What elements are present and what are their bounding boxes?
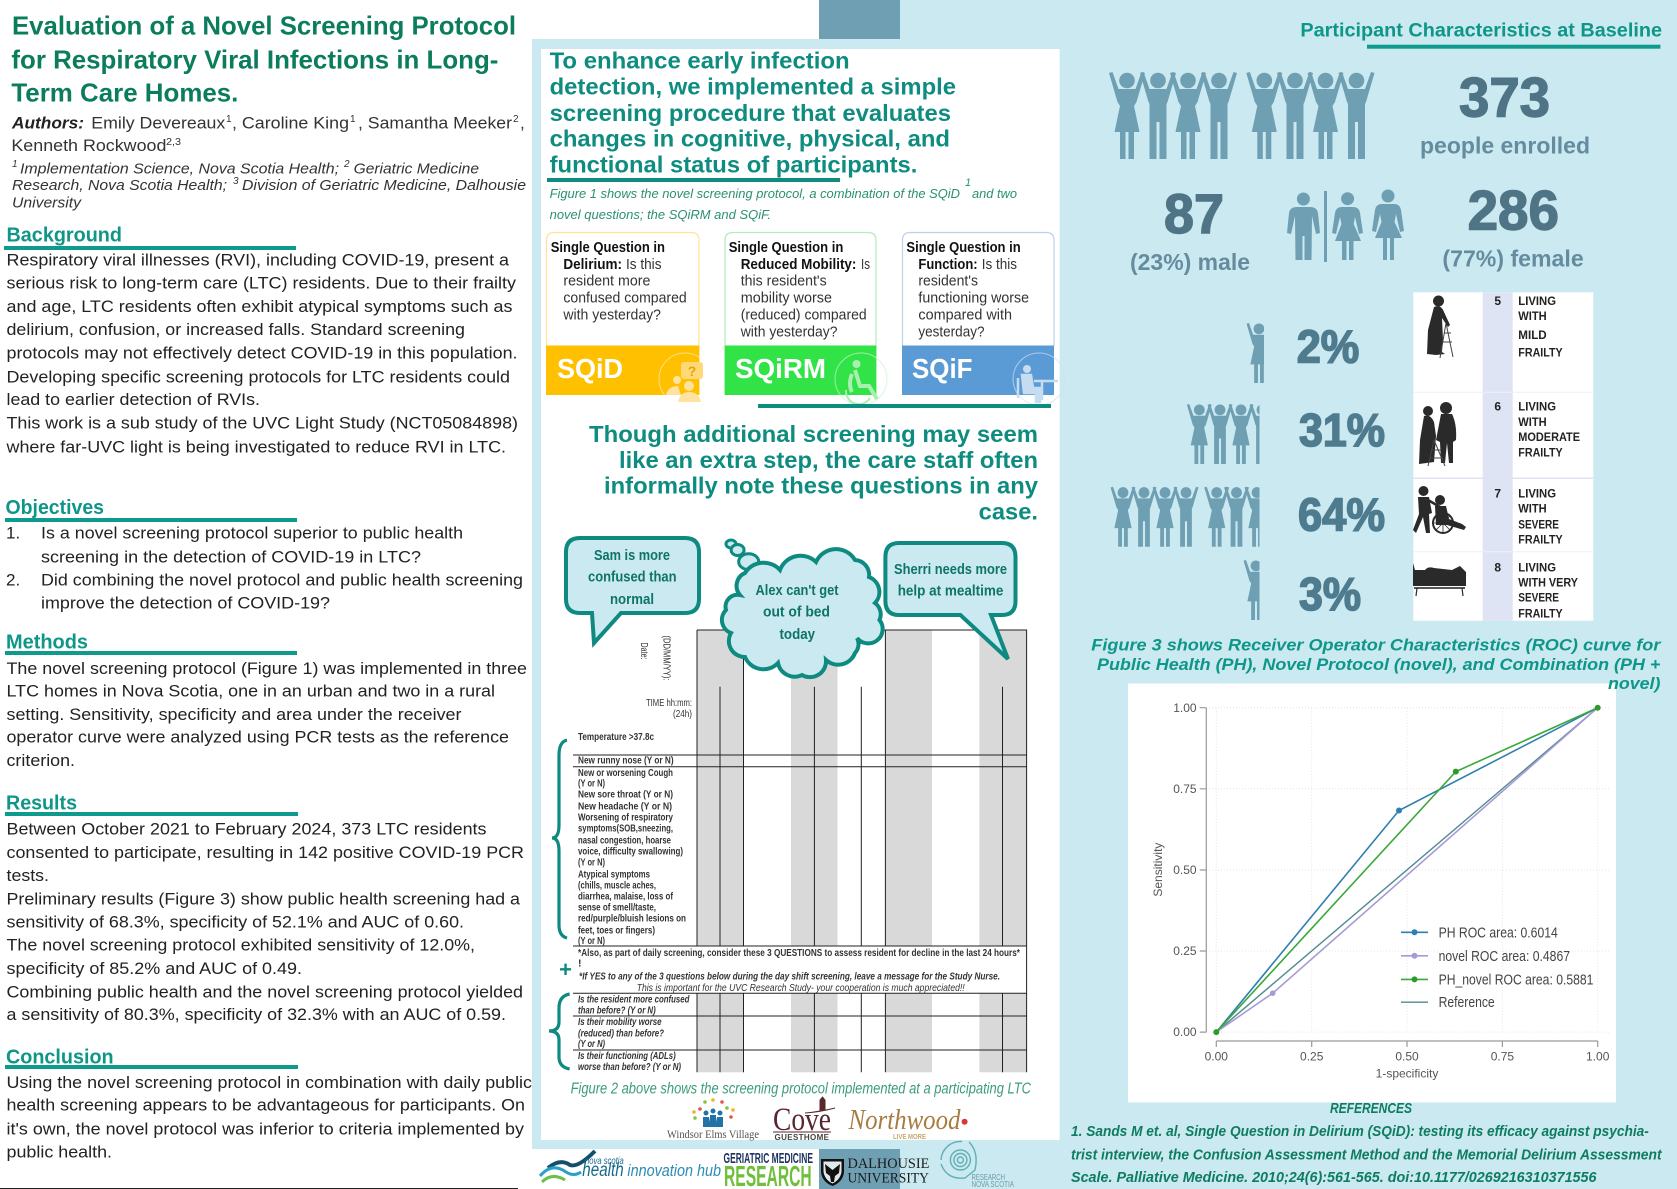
section: objectives: Did combining the novel protocol and public health screening <box>41 571 523 590</box>
card: SQiRM: Reduced Mobility: <box>741 257 856 273</box>
section: background: Background <box>6 225 122 247</box>
logo: Windsor Elms Village <box>667 1098 759 1141</box>
axis labels: 0.50 <box>1395 1050 1419 1064</box>
row: level 5: MILD <box>1518 328 1547 342</box>
pictogram: 31% <box>1186 404 1260 464</box>
row: level 7: SEVERE <box>1518 517 1559 531</box>
heading: screening procedure: To enhance early infection <box>550 48 850 74</box>
references: REFERENCES <box>1330 1100 1412 1117</box>
legend: PH_novel ROC area: 0.5881 <box>1439 972 1593 988</box>
card: SQiRM: SQiRM <box>735 353 826 384</box>
logo: Research Nova Scotia: NOVA SCOTIA <box>972 1179 1014 1189</box>
row: level 8: LIVING <box>1518 561 1556 575</box>
icon: person in bed <box>1413 563 1466 596</box>
figure 2: screening table: (DD/MM/YY): <box>661 636 673 680</box>
section: methods: criterion. <box>6 751 75 770</box>
section: conclusion: Conclusion <box>6 1046 114 1068</box>
figure 2: screening table: Date: <box>638 642 650 660</box>
logo: Cove Guest Home: Cove <box>773 1102 831 1138</box>
card: SQiRM <box>725 232 887 405</box>
axis labels: 0.75 <box>1491 1050 1514 1064</box>
figure 2: screening table: (reduced) than before? <box>578 1028 664 1040</box>
authors: , <box>520 113 525 132</box>
section: objectives: Is a novel screening protocol superior to public health <box>41 523 463 542</box>
figure 2: screening table: Worsening of respiratory <box>578 812 673 824</box>
heading: screening procedure: screening procedure that evaluates <box>550 100 951 126</box>
series: PH_novel <box>1213 705 1601 1035</box>
card: SQiRM: mobility worse <box>741 291 832 307</box>
figure 2: screening table: ! <box>578 958 582 970</box>
figure 2: screening table: (24h) <box>673 708 692 720</box>
section: methods: The novel screening protocol (Figure 1) was implemented in three <box>6 659 527 678</box>
card: SQiF <box>902 232 1065 405</box>
figure 2: screening table: worse than before? (Y or N) <box>578 1061 681 1073</box>
logo: Dalhousie University: DALHOUSIE <box>848 1156 929 1172</box>
logo: Dalhousie University: UNIVERSITY <box>848 1171 929 1187</box>
card: SQiD: Delirium: <box>563 257 622 273</box>
card: SQiF: Single Question in <box>906 240 1021 256</box>
pictogram: 3% <box>1244 560 1260 620</box>
caption: figure 3: Public Health (PH), Novel Protocol (novel), and Combination (PH + <box>1097 655 1660 674</box>
heading: screening procedure: changes in cognitive, physical, and <box>550 125 950 151</box>
section: methods <box>5 631 527 770</box>
figure 2: screening table: Is their functioning (ADLs) <box>578 1050 676 1062</box>
row: level 8: WITH VERY <box>1518 576 1578 590</box>
figure 2: screening table: symptoms(SOB,sneezing, <box>578 823 673 835</box>
section: conclusion <box>5 1046 533 1161</box>
row: level 7: 7 <box>1494 486 1501 500</box>
thought bubble: Alex: today <box>780 627 815 643</box>
row: level 8: 8 <box>1494 561 1501 575</box>
caption: figure 2: Figure 2 above shows the screening protocol implemented at a participating LTC <box>571 1080 1032 1097</box>
row: level 5: WITH <box>1518 309 1547 323</box>
axis labels: Sensitivity <box>1151 843 1165 897</box>
section: results: specificity of 85.2% and AUC of 0.49. <box>6 959 302 978</box>
figure 2: screening table: Temperature >37.8c <box>578 731 654 743</box>
section: methods: Methods <box>6 631 88 653</box>
section: results: Combining public health and the novel screening protocol yielded <box>6 982 523 1001</box>
section: conclusion: public health. <box>6 1142 112 1161</box>
section: results: The novel screening protocol exhibited sensitivity of 12.0%, <box>6 936 475 955</box>
figure 2: screening table: Is their mobility worse <box>578 1016 662 1028</box>
heading: screening procedure <box>547 48 956 182</box>
card: SQiF: Function: <box>918 257 978 273</box>
section: methods: operator curve were analyzed using PCR tests as the reference <box>6 728 509 747</box>
card: SQiF: resident's <box>918 274 978 290</box>
authors: , Caroline King <box>232 113 349 132</box>
stat: 286 female: 286 <box>1468 178 1559 241</box>
section: conclusion: health screening appears to be advantageous for participants. On <box>6 1096 525 1115</box>
row: level 5: FRAILTY <box>1518 346 1563 360</box>
logo: Research Nova Scotia <box>941 1141 1014 1189</box>
section: objectives: improve the detection of COVID-19? <box>41 593 330 612</box>
section: results <box>5 793 524 1024</box>
card: SQiRM: this resident's <box>741 274 827 290</box>
stat: 373 people enrolled <box>1420 66 1590 158</box>
row: level 5: LIVING <box>1518 294 1556 308</box>
heading: additional screening: like an extra step, the care staff often <box>619 447 1038 473</box>
legend <box>1401 925 1593 1011</box>
icon row: enrolled people <box>1109 72 1374 159</box>
heading: participant characteristics: Participant Characteristics at Baseline <box>1300 21 1662 42</box>
speech bubble: Sam: Sam is more <box>594 548 670 564</box>
series: reference <box>1216 708 1598 1032</box>
row: level 8: FRAILTY <box>1518 607 1563 621</box>
stat: 373 people enrolled: people enrolled <box>1420 132 1590 158</box>
row: level 6: LIVING <box>1518 400 1556 414</box>
figure 2: screening table: nasal congestion, hoarse <box>578 834 671 846</box>
caption: figure 3: Figure 3 shows Receiver Operator Characteristics (ROC) curve for <box>1091 636 1662 655</box>
authors: , Samantha Meeker <box>358 113 512 132</box>
figure 2: screening table: (Y or N) <box>578 1038 605 1050</box>
stat: 64%: 64% <box>1298 489 1385 541</box>
row: level 5: 5 <box>1494 294 1501 308</box>
axis labels <box>1151 701 1610 1080</box>
logo: geriatric medicine research: GERIATRIC MEDICINE <box>724 1150 813 1167</box>
title: Evaluation of a Novel Screening Protocol <box>12 11 516 41</box>
caption: figure 1: Figure 1 shows the novel screening protocol, a combination of the SQiD <box>550 186 960 201</box>
speech bubble: Sherri <box>885 543 1016 659</box>
heading: additional screening <box>589 421 1038 525</box>
logo: Windsor Elms Village: Windsor Elms Village <box>667 1127 759 1141</box>
card: SQiF: yesterday? <box>918 324 984 340</box>
stat: 3%: 3% <box>1299 568 1361 620</box>
figure 2: screening table: Atypical symptoms <box>578 868 650 880</box>
caption: figure 3 <box>1091 636 1662 693</box>
figure 2: screening table: (Y or N) <box>578 935 605 947</box>
title: for Respiratory Viral Infections in Long- <box>11 44 498 74</box>
row: level 6: FRAILTY <box>1518 446 1563 460</box>
card: SQiRM: (reduced) compared <box>741 308 867 324</box>
card: SQiF: compared with <box>918 308 1012 324</box>
card: SQiRM: Is <box>861 257 870 273</box>
icon: person at table <box>1013 353 1065 405</box>
affiliations: Research, Nova Scotia Health; <box>12 177 227 194</box>
card: SQiF: Is this <box>982 257 1017 273</box>
legend: novel ROC area: 0.4867 <box>1439 949 1570 965</box>
row: level 8 <box>1494 561 1578 621</box>
section: background: Developing specific screening protocols for LTC residents could <box>6 367 510 386</box>
section: objectives: 1. <box>6 523 20 542</box>
icon: people with question <box>659 353 711 405</box>
section: results: Between October 2021 to February 2024, 373 LTC residents <box>6 820 486 839</box>
icon: person with walker <box>1427 296 1453 358</box>
affiliations: Implementation Science, Nova Scotia Health; <box>20 160 339 177</box>
panel: participant characteristics <box>1109 21 1662 621</box>
icon: wheelchair <box>835 353 887 405</box>
logo: Cove Guest Home: GUESTHOME <box>774 1133 830 1142</box>
logo: nova scotia health innovation hub: health <box>582 1160 624 1181</box>
figure 2: screening table: feet, toes or fingers) <box>578 924 655 936</box>
affiliations: 1 <box>12 159 18 170</box>
section: methods: setting. Sensitivity, specificity and area under the receiver <box>6 705 462 724</box>
figure 2: screening table: *Also, as part of daily screening, consider these 3 QUESTIONS to assess resident for decline in the last 24 hours* <box>578 947 1021 959</box>
card: SQiD <box>546 232 711 405</box>
card: SQiD: Is this <box>626 257 662 273</box>
section: results: sensitivity of 68.3%, specificity of 52.1% and AUC of 0.60. <box>6 912 464 931</box>
caption: figure 1: and two <box>972 186 1017 201</box>
row: level 8: SEVERE <box>1518 591 1559 605</box>
logo: geriatric medicine research <box>724 1150 813 1189</box>
logo: nova scotia health innovation hub <box>540 1151 721 1182</box>
section: objectives: 2. <box>6 571 20 590</box>
affiliations: 3 <box>233 176 239 187</box>
section: objectives: Objectives <box>6 497 104 519</box>
section: background: and age, LTC residents often exhibit atypical symptoms such as <box>6 297 512 316</box>
axis labels: 1.00 <box>1173 701 1197 715</box>
affiliations: Division of Geriatric Medicine, Dalhousie <box>242 177 526 194</box>
section: results: consented to participate, resulting in 142 positive COVID-19 PCR <box>6 843 524 862</box>
stat: 373 people enrolled: 373 <box>1459 66 1550 129</box>
section: methods: LTC homes in Nova Scotia, one in an urban and two in a rural <box>6 682 495 701</box>
figure 2: screening table <box>573 630 1027 1073</box>
authors: Emily Devereaux <box>91 113 226 132</box>
logo: nova scotia health innovation hub: nova scotia <box>585 1155 624 1167</box>
section: background: serious risk to long-term care (LTC) residents. Due to their frailty <box>6 274 517 293</box>
pictogram: 64% <box>1111 487 1269 547</box>
axis labels: 0.25 <box>1300 1050 1324 1064</box>
stat: 31%: 31% <box>1299 404 1385 456</box>
figure 2: screening table: Is the resident more confused <box>578 994 690 1006</box>
logo: Northwood: LIVE MORE <box>893 1132 926 1141</box>
logo: Dalhousie University <box>821 1156 929 1187</box>
figure 2: screening table: (Y or N) <box>578 778 605 790</box>
authors: Kenneth Rockwood <box>11 136 166 155</box>
axis labels: 1-specificity <box>1376 1066 1438 1080</box>
row: level 7: LIVING <box>1518 486 1556 500</box>
card: SQiF: SQiF <box>912 353 972 384</box>
speech bubble: Sam <box>566 538 699 643</box>
row: level 6: WITH <box>1518 415 1547 429</box>
title: Term Care Homes. <box>11 78 238 108</box>
section: results: Preliminary results (Figure 3) show public health screening had a <box>6 889 521 908</box>
row: level 7: FRAILTY <box>1518 532 1563 546</box>
authors: 1 <box>350 114 356 125</box>
card: SQiD: resident more <box>563 274 650 290</box>
stat: 286 female: (77%) female <box>1442 246 1584 272</box>
section: background: This work is a sub study of the UVC Light Study (NCT05084898) <box>6 413 518 432</box>
axis labels: 0.00 <box>1205 1050 1228 1064</box>
heading: additional screening: Though additional screening may seem <box>589 421 1038 447</box>
section: background <box>4 225 518 456</box>
authors <box>11 113 525 155</box>
panel: left column <box>4 11 533 1161</box>
card: SQiD: Single Question in <box>551 240 665 256</box>
icon: person in wheelchair <box>1413 486 1466 533</box>
logo: Research Nova Scotia: RESEARCH <box>972 1172 1005 1182</box>
thought bubble: Alex: out of bed <box>763 605 830 621</box>
references <box>1071 1100 1663 1186</box>
speech bubble: Sam: normal <box>610 592 654 608</box>
figure 2: screening table: voice, difficulty swallowing) <box>578 845 683 857</box>
card: SQiRM: with yesterday? <box>740 324 838 340</box>
legend: PH ROC area: 0.6014 <box>1439 925 1558 941</box>
heading: screening procedure: detection, we implemented a simple <box>550 74 956 100</box>
affiliations: Geriatric Medicine <box>354 160 479 177</box>
frailty scale table <box>1413 292 1593 621</box>
figure 2: screening table: New or worsening Cough <box>578 767 673 779</box>
stat: 286 female <box>1442 178 1584 272</box>
section: background: Respiratory viral illnesses (RVI), including COVID-19, present a <box>6 251 510 270</box>
speech bubble: Sam: confused than <box>588 570 676 586</box>
pictogram: 2% <box>1246 323 1264 383</box>
logo: Northwood: Northwood <box>848 1105 961 1136</box>
card: SQiD: confused compared <box>563 291 687 307</box>
caption: figure 1: 1 <box>965 177 971 189</box>
heading: screening procedure: functional status of participants. <box>550 151 917 177</box>
thought bubble: Alex <box>722 540 883 677</box>
section: objectives: screening in the detection of COVID-19 in LTC? <box>41 547 421 566</box>
speech bubble: Sherri: help at mealtime <box>898 584 1003 600</box>
brace: novel questions <box>549 994 570 1069</box>
caption: figure 1: novel questions; the SQiRM and SQiF. <box>550 207 771 222</box>
chart: ROC curve <box>1128 684 1616 1102</box>
figure 2: screening table: New sore throat (Y or N) <box>578 789 673 801</box>
section: objectives <box>5 497 523 612</box>
icon: people with question: ? <box>688 363 696 379</box>
caption: figure 3: novel) <box>1608 674 1661 693</box>
stat: 2%: 2% <box>1297 321 1359 373</box>
section: conclusion: Using the novel screening protocol in combination with daily public <box>6 1073 533 1092</box>
section: results: tests. <box>6 866 49 885</box>
row: level 6: MODERATE <box>1518 430 1580 444</box>
caption: figure 1 <box>550 177 1017 222</box>
card: SQiD: SQiD <box>557 353 623 384</box>
figure 2: screening table: red/purple/bluish lesions on <box>578 913 686 925</box>
affiliations: 2 <box>343 159 350 170</box>
plus sign: + <box>559 957 572 982</box>
stat: 87 male: (23%) male <box>1130 249 1250 275</box>
icon: person assisted with walker <box>1419 402 1456 466</box>
brace: symptoms <box>552 740 567 938</box>
affiliations: University <box>12 195 83 212</box>
figure 2: screening table: TIME hh:mm: <box>646 697 692 709</box>
row: level 6 <box>1494 400 1580 460</box>
affiliations <box>12 159 526 212</box>
section: conclusion: it's own, the novel protocol was inferior to criteria implemented by <box>6 1120 525 1139</box>
icon: male and female figures <box>1287 190 1404 262</box>
card: SQiF: functioning worse <box>918 291 1029 307</box>
figure 2: screening table: New headache (Y or N) <box>578 800 672 812</box>
legend: Reference <box>1439 995 1495 1011</box>
row: level 7: WITH <box>1518 501 1547 515</box>
stat: 87 male: 87 <box>1164 182 1224 245</box>
logo: nova scotia health innovation hub: innovation hub <box>627 1161 721 1180</box>
section: background: delirium, confusion, or increased falls. Standard screening <box>6 320 465 339</box>
axis labels: 0.50 <box>1173 863 1197 877</box>
row: level 5 <box>1494 294 1563 360</box>
figure 2: screening table: (Y or N) <box>578 857 605 869</box>
series: PH <box>1216 708 1598 1032</box>
axis labels: 0.00 <box>1173 1025 1197 1039</box>
section: background: lead to earlier detection of RVIs. <box>6 390 260 409</box>
row: level 7 <box>1494 486 1563 546</box>
thought bubble: Alex: Alex can't get <box>756 583 839 599</box>
figure 2: screening table: sense of smell/taste, <box>578 902 656 914</box>
heading: additional screening: informally note these questions in any <box>604 473 1038 499</box>
panel: centre white panel <box>541 48 1065 1142</box>
authors: 2 <box>513 114 519 125</box>
row: level 6: 6 <box>1494 400 1501 414</box>
figure 2: screening table: (chills, muscle aches, <box>578 879 656 891</box>
axis labels: 0.25 <box>1173 944 1197 958</box>
card: SQiD: with yesterday? <box>562 308 661 324</box>
figure 2: screening table: than before? (Y or N) <box>578 1004 656 1016</box>
section: results: Results <box>6 793 77 815</box>
stat: 87 male <box>1130 182 1250 275</box>
authors: 2,3 <box>166 137 181 148</box>
authors: 1 <box>226 114 232 125</box>
figure 2: screening table: This is important for the UVC Research Study- your cooperation is much appreciated!! <box>637 982 965 994</box>
axis labels: 0.75 <box>1173 782 1197 796</box>
figure 2: screening table: New runny nose (Y or N) <box>578 754 674 766</box>
authors: Authors: <box>11 113 84 132</box>
figure 2: screening table: *If YES to any of the 3 questions below during the day shift screening, leave a message for the Study Nurse. <box>579 970 1000 982</box>
section: results: a sensitivity of 80.3%, specificity of 32.3% with an AUC of 0.59. <box>6 1005 506 1024</box>
series: novel <box>1216 708 1598 1032</box>
references: Scale. Palliative Medicine. 2010;24(6):561-565. doi:10.1177/0269216310371556 <box>1071 1169 1597 1186</box>
section: background: where far-UVC light is being investigated to reduce RVI in LTC. <box>5 437 506 456</box>
heading: additional screening: case. <box>979 499 1038 525</box>
title <box>11 11 516 108</box>
section: background: protocols may not effectively detect COVID-19 in this population. <box>6 343 518 362</box>
axis labels: 1.00 <box>1586 1050 1610 1064</box>
speech bubble: Sherri: Sherri needs more <box>894 562 1007 578</box>
card: SQiRM: Single Question in <box>729 240 843 256</box>
figure 2: screening table: diarrhea, malaise, loss of <box>578 890 673 902</box>
